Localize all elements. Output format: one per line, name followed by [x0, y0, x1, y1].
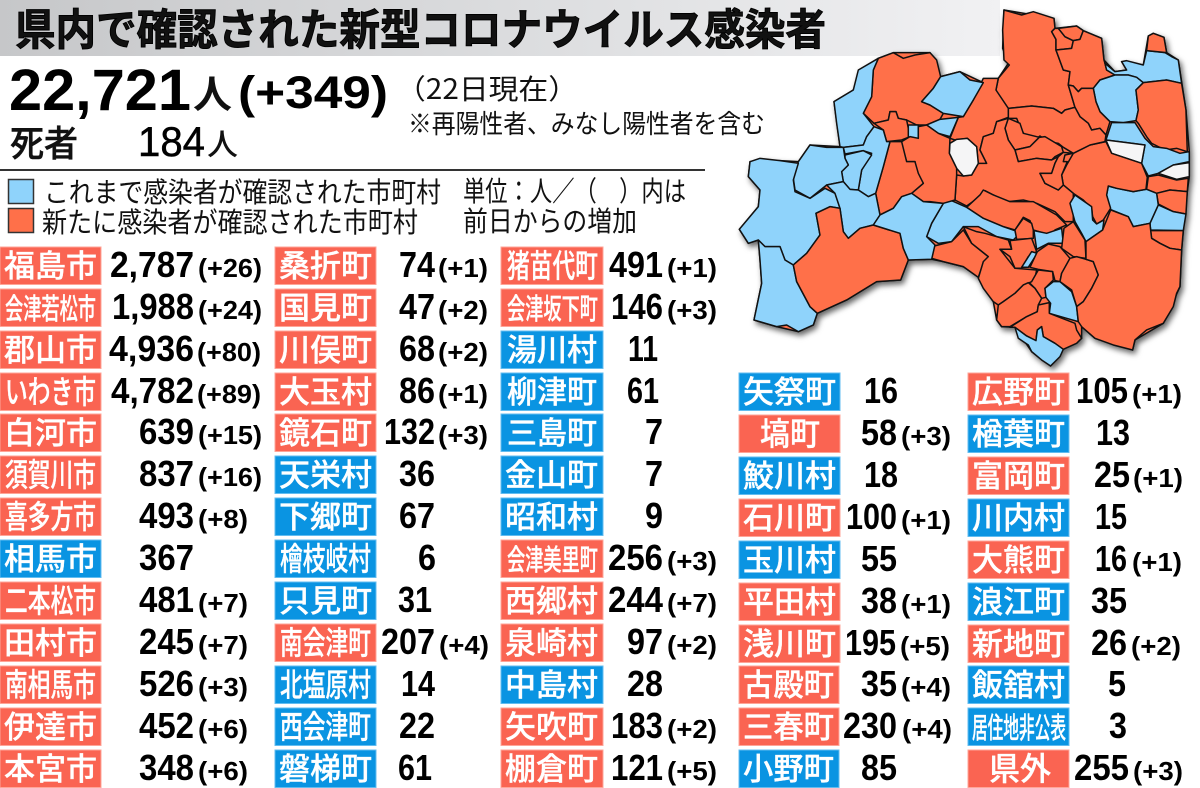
unit note — [463, 170, 686, 240]
row: 平田村 — [739, 577, 951, 622]
row: 三春町: 三春町 — [743, 702, 834, 747]
row: 矢吹町: 矢吹町 — [505, 702, 598, 747]
row: 湯川村 — [501, 325, 658, 370]
row: 南会津町: 南会津町 — [280, 618, 371, 664]
row: 磐梯町: 磐梯町 — [279, 744, 372, 788]
row: 鏡石町: 132 — [384, 411, 435, 452]
row: 只見町: 31 — [398, 579, 432, 620]
row: 本宮市: (+6) — [198, 756, 248, 786]
row: 泉崎村: (+2) — [667, 630, 717, 660]
row: 楢葉町: 楢葉町 — [972, 409, 1065, 454]
row: 本宮市 — [0, 744, 248, 788]
row: 石川町: 石川町 — [743, 493, 836, 538]
row: 福島市 — [0, 241, 262, 286]
total count: (+349) — [238, 67, 388, 118]
row: 居住地非公表: 居住地非公表 — [972, 705, 1066, 747]
row: 白河市: 639 — [139, 411, 194, 452]
row: 石川町 — [739, 493, 951, 538]
row: 桑折町 — [275, 241, 488, 286]
row: 本宮市: 本宮市 — [4, 744, 97, 788]
row: 西郷村: 西郷村 — [505, 576, 598, 621]
row: 浅川町: (+5) — [900, 631, 950, 661]
row: 三春町: (+4) — [902, 714, 952, 744]
row: 南会津町: (+4) — [439, 630, 489, 660]
row: 大玉村 — [275, 367, 488, 412]
row: 喜多方市 — [0, 492, 248, 538]
row: 川内村: 川内村 — [972, 493, 1065, 538]
row: 伊達市: 伊達市 — [4, 702, 97, 747]
row: 川俣町: 68 — [399, 328, 435, 369]
row: 国見町 — [275, 283, 488, 328]
row: 泉崎村 — [501, 618, 717, 663]
row: 磐梯町 — [275, 744, 432, 788]
row: 飯舘村 — [968, 660, 1126, 705]
row: 石川町: 100 — [846, 496, 897, 537]
row: 伊達市 — [0, 702, 248, 747]
row: 昭和村 — [501, 492, 663, 537]
row: 会津美里町: (+3) — [667, 546, 717, 576]
row: 須賀川市: 837 — [139, 453, 194, 494]
row: 大熊町 — [968, 535, 1182, 580]
row: 須賀川市: (+16) — [198, 462, 262, 492]
row: 泉崎村: 泉崎村 — [505, 618, 598, 663]
row: 大玉村: 大玉村 — [279, 367, 372, 412]
row: 浪江町 — [968, 577, 1127, 622]
row: 白河市: (+15) — [198, 420, 262, 450]
row: 県外 — [968, 744, 1183, 788]
row: 湯川村: 湯川村 — [507, 325, 597, 370]
row: 玉川村 — [739, 535, 897, 580]
row: 南相馬市: 南相馬市 — [5, 660, 96, 706]
row: 須賀川市: 須賀川市 — [5, 450, 96, 496]
row: 三島町: 三島町 — [507, 408, 597, 453]
row: 南相馬市: (+3) — [198, 672, 248, 702]
row: 郡山市: 郡山市 — [4, 325, 97, 370]
row: 国見町: 47 — [399, 286, 435, 327]
row: 金山町 — [501, 450, 663, 495]
row: 飯舘村: 5 — [1108, 663, 1126, 704]
row: いわき市: (+89) — [197, 379, 261, 409]
row: 広野町: 広野町 — [972, 367, 1065, 412]
row: 鏡石町: (+3) — [438, 420, 488, 450]
deaths: 人 — [207, 120, 238, 164]
row: 会津若松市 — [0, 286, 262, 328]
row: 中島村: 28 — [627, 663, 663, 704]
row: 田村市: (+7) — [198, 630, 248, 660]
row: 新地町: 新地町 — [972, 619, 1065, 664]
row: 大熊町: 大熊町 — [972, 535, 1065, 580]
row: 鮫川村: 18 — [864, 454, 898, 495]
row: 西郷村 — [501, 576, 717, 621]
deaths: 184 — [138, 118, 205, 165]
row: 矢吹町 — [501, 702, 717, 747]
row: 鏡石町: 鏡石町 — [279, 408, 372, 453]
row: 塙町 — [739, 409, 951, 455]
row: 須賀川市 — [0, 450, 262, 496]
row: 川俣町 — [275, 325, 488, 370]
row: 南会津町 — [275, 618, 489, 664]
total count: 22,721 — [9, 58, 191, 123]
deaths — [10, 115, 238, 167]
row: 棚倉町: (+5) — [667, 756, 717, 786]
row: 柳津町 — [501, 367, 659, 412]
row: 浅川町: 浅川町 — [743, 619, 836, 664]
row: 相馬市: 相馬市 — [4, 534, 97, 579]
row: 川俣町: (+2) — [438, 337, 488, 367]
row: 塙町: 58 — [861, 412, 897, 453]
row: 白河市: 白河市 — [4, 408, 97, 453]
row: 金山町: 金山町 — [505, 450, 598, 495]
row: 喜多方市: 493 — [139, 495, 194, 536]
row: 広野町: 105 — [1076, 370, 1128, 411]
row: 矢祭町: 矢祭町 — [743, 367, 836, 412]
legend: これまで感染者が確認された市町村 — [44, 171, 441, 211]
row: 田村市: 田村市 — [4, 618, 97, 663]
row: 古殿町: (+4) — [901, 672, 951, 702]
row: 棚倉町: 121 — [611, 747, 663, 788]
row: 南会津町: 207 — [381, 621, 435, 662]
row: 矢吹町: (+2) — [667, 714, 717, 744]
unit note: 前日からの増加 — [463, 200, 637, 240]
row: 相馬市 — [0, 534, 194, 579]
row: 伊達市: (+6) — [198, 714, 248, 744]
row: 二本松市: 二本松市 — [5, 576, 96, 622]
row: 中島村 — [501, 660, 663, 705]
row: 矢祭町: 16 — [864, 370, 898, 411]
row: 本宮市: 348 — [139, 747, 194, 788]
row: 飯舘村: 飯舘村 — [972, 660, 1065, 705]
row: 玉川村: 玉川村 — [743, 535, 836, 580]
row: 楢葉町: 13 — [1096, 412, 1130, 453]
case table — [0, 241, 1183, 788]
row: 猪苗代町 — [501, 241, 717, 287]
row: 桑折町: 桑折町 — [279, 241, 372, 286]
row: 会津若松市: 会津若松市 — [5, 286, 96, 328]
row: 棚倉町 — [501, 744, 717, 788]
row: いわき市 — [0, 367, 261, 413]
row: 浅川町 — [739, 619, 950, 664]
row: 南相馬市 — [0, 660, 248, 706]
row: 郡山市: 4,936 — [109, 328, 194, 369]
row: 郡山市: (+80) — [197, 337, 261, 367]
row: 喜多方市: 喜多方市 — [5, 492, 96, 538]
row: 国見町: 国見町 — [279, 283, 372, 328]
row: 西会津町: 西会津町 — [280, 702, 371, 748]
row: 泉崎村: 97 — [627, 621, 663, 662]
row: 塙町: (+3) — [901, 421, 951, 451]
row: 会津美里町: 256 — [608, 537, 663, 578]
row: 三春町 — [739, 702, 952, 747]
row: 昭和村: 9 — [645, 495, 663, 536]
row: 会津若松市: 1,988 — [112, 286, 194, 327]
row: 天栄村 — [275, 450, 435, 495]
row: 浅川町: 195 — [845, 622, 896, 663]
row: 県外: (+3) — [1133, 756, 1183, 786]
row: 二本松市 — [0, 576, 248, 622]
row: 小野町: 小野町 — [743, 744, 834, 788]
row: 福島市: 福島市 — [4, 241, 97, 286]
row: 白河市 — [0, 408, 262, 453]
row: 古殿町 — [739, 660, 951, 705]
row: 平田村: 38 — [861, 580, 897, 621]
row: 新地町: (+2) — [1131, 631, 1181, 661]
row: 鮫川村: 鮫川村 — [743, 451, 836, 496]
row: いわき市: いわき市 — [5, 367, 96, 413]
row: 西会津町: 22 — [399, 705, 435, 746]
row: 棚倉町: 棚倉町 — [505, 744, 598, 788]
row: 伊達市: 452 — [139, 705, 194, 746]
row: 県外: 255 — [1074, 747, 1129, 788]
map of Fukushima municipalities — [739, 10, 1189, 366]
row: 柳津町: 柳津町 — [507, 367, 597, 412]
total count — [9, 58, 388, 123]
row: 西郷村: (+7) — [667, 588, 717, 618]
row: 富岡町 — [968, 451, 1183, 496]
row: 福島市: 2,787 — [110, 244, 194, 285]
row: 大熊町: (+1) — [1132, 547, 1182, 577]
row: 下郷町: 67 — [399, 495, 435, 536]
row: 只見町: 只見町 — [279, 576, 372, 621]
row: 小野町: 85 — [861, 747, 897, 788]
row: 塙町: 塙町 — [760, 409, 820, 455]
row: 会津若松市: (+24) — [198, 295, 262, 325]
row: 古殿町: 古殿町 — [743, 660, 834, 705]
row: 古殿町: 35 — [861, 663, 897, 704]
row: 只見町 — [275, 576, 432, 621]
row: 天栄村: 天栄村 — [279, 450, 372, 495]
row: 鮫川村 — [739, 451, 898, 496]
row: 三春町: 230 — [843, 705, 897, 746]
row: 広野町 — [968, 367, 1182, 412]
row: 大熊町: 16 — [1095, 538, 1127, 579]
row: 柳津町: 61 — [627, 370, 659, 411]
note on reinfection: ※再陽性者、みなし陽性者を含む — [408, 104, 765, 141]
row: 広野町: (+1) — [1132, 379, 1182, 409]
row: 矢祭町 — [739, 367, 898, 412]
row: 喜多方市: (+8) — [198, 504, 248, 534]
row: 西郷村: 244 — [608, 579, 663, 620]
row: 下郷町 — [275, 492, 435, 537]
row: 猪苗代町: 猪苗代町 — [507, 241, 598, 287]
row: 檜枝岐村: 6 — [418, 537, 436, 578]
row: 猪苗代町: 491 — [609, 244, 663, 285]
row: 会津坂下町: 146 — [611, 286, 663, 327]
row: 新地町: 26 — [1091, 622, 1127, 663]
unit note: 単位：人／（ ）内は — [463, 170, 686, 210]
row: いわき市: 4,782 — [111, 370, 194, 411]
row: 三島町: 7 — [645, 411, 663, 452]
row: 三島町 — [501, 408, 663, 453]
row: 川内村 — [968, 493, 1127, 538]
row: 相馬市: 367 — [139, 537, 194, 578]
row: 二本松市: 481 — [139, 579, 194, 620]
row: 富岡町: 25 — [1094, 454, 1130, 495]
row: 中島村: 中島村 — [505, 660, 598, 705]
row: 大玉村: (+1) — [438, 379, 488, 409]
row: 下郷町: 下郷町 — [279, 492, 372, 537]
deaths: 死者 — [10, 115, 78, 167]
legend — [8, 171, 441, 241]
row: 会津坂下町 — [501, 286, 717, 328]
row: 平田村: (+1) — [901, 589, 951, 619]
row: 天栄村: 36 — [399, 453, 435, 494]
row: 北塩原村: 14 — [401, 663, 435, 704]
row: 居住地非公表: 3 — [1109, 705, 1127, 746]
row: 新地町 — [968, 619, 1181, 664]
row: 会津坂下町: 会津坂下町 — [507, 286, 598, 328]
row: 郡山市 — [0, 325, 261, 370]
row: 川内村: 15 — [1095, 496, 1127, 537]
row: 会津坂下町: (+3) — [667, 295, 717, 325]
row: 鏡石町 — [275, 408, 488, 453]
row: 小野町 — [739, 744, 897, 788]
row: 田村市: 245 — [139, 621, 194, 662]
row: 富岡町: 富岡町 — [972, 451, 1065, 496]
row: 桑折町: 74 — [399, 244, 435, 285]
row: 昭和村: 昭和村 — [505, 492, 598, 537]
row: 会津美里町: 会津美里町 — [507, 537, 598, 579]
row: 石川町: (+1) — [901, 505, 951, 535]
total count: 人 — [193, 64, 232, 119]
row: 楢葉町 — [968, 409, 1130, 454]
row: 磐梯町: 61 — [398, 747, 432, 788]
row: 浪江町: 浪江町 — [972, 577, 1065, 622]
row: 会津美里町 — [501, 537, 717, 579]
row: 富岡町: (+1) — [1133, 463, 1183, 493]
row: 福島市: (+26) — [198, 253, 262, 283]
row: 南相馬市: 526 — [139, 663, 194, 704]
row: 田村市 — [0, 618, 248, 663]
row: 矢吹町: 183 — [611, 705, 663, 746]
row: 大玉村: 86 — [399, 370, 435, 411]
row: 平田村: 平田村 — [743, 577, 836, 622]
row: 浪江町: 35 — [1091, 580, 1127, 621]
row: 金山町: 7 — [645, 453, 663, 494]
legend: 新たに感染者が確認された市町村 — [42, 201, 418, 241]
row: 国見町: (+2) — [438, 295, 488, 325]
row: 湯川村: 11 — [628, 328, 658, 369]
row: 川俣町: 川俣町 — [279, 325, 372, 370]
row: 北塩原村: 北塩原村 — [280, 660, 371, 706]
row: 檜枝岐村: 檜枝岐村 — [280, 534, 371, 580]
date note: （22日現在） — [396, 68, 578, 108]
row: 猪苗代町: (+1) — [667, 253, 717, 283]
row: 二本松市: (+7) — [198, 588, 248, 618]
row: 桑折町: (+1) — [438, 253, 488, 283]
row: 玉川村: 55 — [861, 538, 897, 579]
